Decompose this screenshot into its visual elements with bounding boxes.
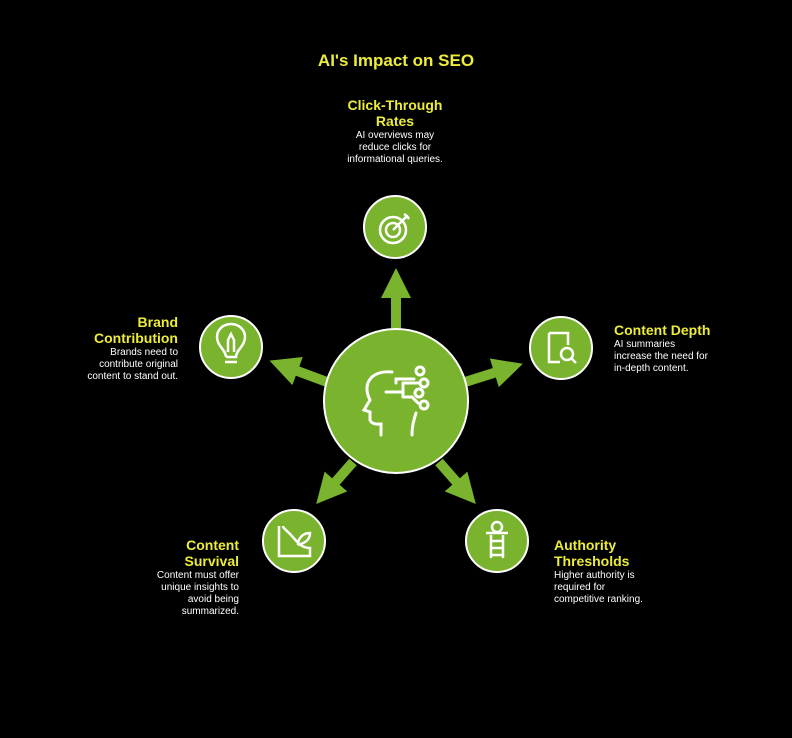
- text: content depth: AI summaries: [614, 339, 675, 350]
- text: click-through: AI overviews may: [356, 130, 434, 141]
- text: content depth: increase the need for: [614, 351, 708, 362]
- text: authority: competitive ranking.: [554, 594, 643, 605]
- text: authority: Authority: [554, 537, 616, 553]
- text: brand: Contribution: [94, 330, 178, 346]
- text: brand: content to stand out.: [87, 371, 178, 382]
- center circle: [324, 329, 468, 473]
- text: authority: Thresholds: [554, 553, 629, 569]
- text: click-through: [347, 97, 443, 165]
- text: content survival: unique insights to: [161, 582, 239, 593]
- text: content depth: Content Depth: [614, 322, 710, 338]
- text: click-through: Rates: [376, 113, 414, 129]
- text: content depth: [614, 322, 710, 374]
- text: content survival: summarized.: [182, 606, 239, 617]
- text: authority: Higher authority is: [554, 570, 635, 581]
- text: brand: Brands need to: [110, 347, 178, 358]
- arrows: [292, 292, 500, 486]
- text: brand: [87, 314, 178, 382]
- text: brand: contribute original: [99, 359, 178, 370]
- text: content survival: Content: [186, 537, 239, 553]
- text: authority: [554, 537, 643, 605]
- icon: AI head: [364, 367, 428, 435]
- satellite: click-through: [364, 196, 426, 258]
- satellite: authority: [466, 510, 528, 572]
- satellite: content depth: [530, 317, 592, 379]
- text: click-through: Click-Through: [348, 97, 442, 113]
- text: content depth: in-depth content.: [614, 363, 688, 374]
- text: authority: required for: [554, 582, 605, 593]
- satellite: brand: [200, 316, 262, 378]
- text: content survival: Survival: [185, 553, 239, 569]
- text: click-through: reduce clicks for: [359, 142, 431, 153]
- satellite: content survival: [263, 510, 325, 572]
- text: content survival: [157, 537, 239, 617]
- text: content survival: avoid being: [188, 594, 239, 605]
- text: content survival: Content must offer: [157, 570, 239, 581]
- text: brand: Brand: [138, 314, 178, 330]
- title: AI's Impact on SEO: [318, 51, 474, 70]
- text: click-through: informational queries.: [347, 154, 443, 165]
